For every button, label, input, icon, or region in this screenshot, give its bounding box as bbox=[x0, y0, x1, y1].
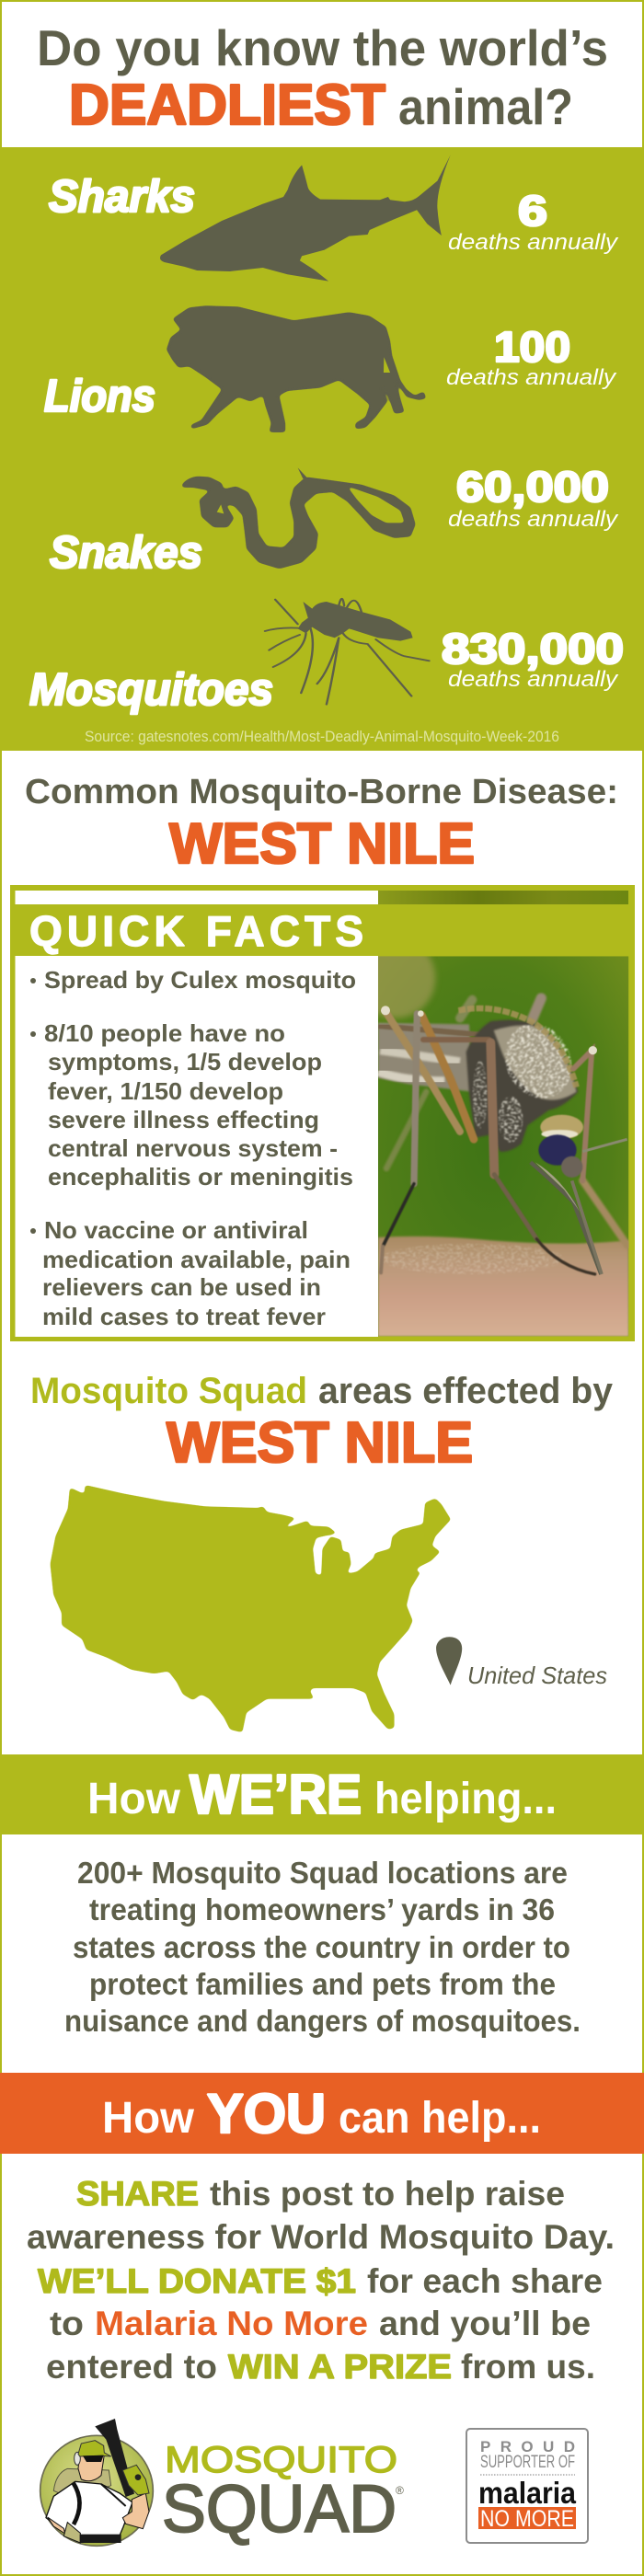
fact list: mild cases to treat fever bbox=[42, 1303, 326, 1330]
icon: mosquito silhouette bbox=[265, 599, 429, 705]
abdomen bbox=[378, 1023, 472, 1092]
fact list: 8/10 people have no bbox=[44, 1019, 285, 1047]
text block: how we're helping: states across the country in order to bbox=[73, 1930, 570, 1964]
heading: common mosquito-borne disease: WEST NILE bbox=[169, 812, 475, 876]
fact list: encephalitis or meningitis bbox=[48, 1163, 353, 1190]
text block: how we're helping: 200+ Mosquito Squad locations are bbox=[77, 1856, 568, 1890]
mosquito deaths number: 830,000 bbox=[442, 625, 624, 673]
legs bbox=[381, 1010, 595, 1274]
map: United States bbox=[50, 1485, 451, 1732]
icon: lion silhouette bbox=[167, 305, 426, 432]
badge: proud supporter of malaria no more bbox=[466, 2429, 588, 2543]
shark deaths number: 6 bbox=[518, 187, 547, 235]
text block: how you can help: WIN A PRIZE bbox=[228, 2348, 452, 2386]
lion label: Lions bbox=[44, 372, 155, 421]
panel: animal death comparison bbox=[0, 147, 644, 751]
snake label: Snakes bbox=[50, 528, 202, 578]
panel: quick facts bbox=[10, 885, 635, 1341]
text block: how we're helping: treating homeowners’ yards in 36 bbox=[89, 1892, 555, 1926]
text block: how you can help: WE’LL DONATE $1 bbox=[38, 2262, 356, 2300]
source note: Source: gatesnotes.com/Health/Most-Deadly-Animal-Mosquito-Week-2016 bbox=[85, 728, 559, 745]
lion deaths number: deaths annually bbox=[446, 365, 617, 390]
header panel bbox=[1, 1, 643, 148]
title line 1: Do you know the world’s bbox=[37, 19, 608, 76]
lion deaths number: 100 bbox=[494, 323, 570, 371]
text block: how you can help: and you’ll be bbox=[379, 2305, 591, 2342]
banner: how you can help: can help... bbox=[339, 2094, 541, 2143]
banner: how we're helping: WE’RE bbox=[190, 1764, 362, 1825]
text block: how you can help: awareness for World Mosquito Day. bbox=[27, 2218, 615, 2256]
banner: how you can help bbox=[0, 2073, 644, 2154]
title line 2: animal? bbox=[398, 78, 573, 135]
side borders bbox=[1, 751, 643, 2575]
fact list bbox=[30, 966, 356, 1330]
text block: how you can help: to bbox=[50, 2305, 84, 2342]
heading: common mosquito-borne disease: Common Mosquito-Borne Disease: bbox=[25, 773, 618, 811]
mosquito label: Mosquitoes bbox=[29, 665, 273, 715]
text block: how you can help bbox=[27, 2175, 615, 2386]
fact list: No vaccine or antiviral bbox=[44, 1216, 308, 1244]
quick facts heading: QUICK FACTS bbox=[29, 907, 363, 955]
fact list: severe illness effecting bbox=[48, 1106, 319, 1133]
fact list: relievers can be used in bbox=[42, 1273, 321, 1301]
text block: how you can help: from us. bbox=[461, 2348, 595, 2386]
text block: how you can help: this post to help raise bbox=[210, 2175, 565, 2213]
heading: areas effected bbox=[30, 1371, 614, 1475]
banner: how we're helping bbox=[0, 1754, 644, 1834]
title line 2: DEADLIEST bbox=[69, 74, 385, 137]
wordmark: MOSQUITO bbox=[165, 2440, 397, 2480]
mosquito deaths number: deaths annually bbox=[448, 667, 619, 692]
banner: how we're helping: helping... bbox=[374, 1775, 557, 1823]
snake deaths number bbox=[448, 463, 619, 532]
banner: how you can help: YOU bbox=[207, 2083, 326, 2145]
logo: Mosquito Squad bbox=[40, 2419, 404, 2547]
title line 2 bbox=[69, 74, 573, 137]
heading: areas effected: WEST NILE bbox=[167, 1411, 473, 1475]
fact list: Spread by Culex mosquito bbox=[44, 966, 356, 994]
text block: how we're helping bbox=[64, 1856, 581, 2038]
mosquito deaths number bbox=[442, 625, 624, 692]
text block: how you can help: Malaria No More bbox=[95, 2305, 368, 2342]
lion deaths number bbox=[446, 323, 617, 390]
snake deaths number: deaths annually bbox=[448, 507, 619, 532]
map legend bbox=[436, 1637, 607, 1689]
icon: mascot bbox=[40, 2419, 153, 2546]
text block: how you can help: for each share bbox=[367, 2262, 603, 2300]
shark label: Sharks bbox=[49, 172, 195, 222]
snake deaths number: 60,000 bbox=[456, 463, 609, 511]
text block: how you can help: entered to bbox=[46, 2348, 217, 2386]
shark deaths number: deaths annually bbox=[448, 230, 619, 255]
badge: proud supporter of malaria no more: PROUD bbox=[480, 2438, 575, 2455]
fact list: fever, 1/150 develop bbox=[48, 1077, 283, 1105]
text block: how we're helping: protect families and pets from the bbox=[89, 1967, 556, 2001]
thorax bbox=[466, 1019, 578, 1152]
logo: Mosquito Squad: SQUAD bbox=[162, 2472, 397, 2547]
blurred background legs bbox=[386, 998, 627, 1245]
shark deaths number bbox=[448, 187, 619, 255]
photo: mosquito on skin bbox=[378, 956, 629, 1337]
head bbox=[531, 1162, 601, 1274]
heading: common mosquito-borne disease bbox=[25, 773, 618, 876]
heading: areas effected: areas effected by bbox=[318, 1371, 614, 1411]
banner: how you can help: How bbox=[102, 2094, 195, 2143]
text block: how we're helping: nuisance and dangers of mosquitoes. bbox=[64, 2004, 581, 2038]
icon: location pin bbox=[436, 1637, 462, 1685]
text block: how you can help: SHARE bbox=[76, 2175, 199, 2213]
badge: proud supporter of malaria no more: malaria bbox=[478, 2476, 577, 2510]
banner: how we're helping: How bbox=[87, 1775, 181, 1823]
fact list: medication available, pain bbox=[42, 1246, 351, 1273]
heading: areas effected: Mosquito Squad bbox=[30, 1371, 307, 1411]
badge: proud supporter of malaria no more: SUPPORTER OF bbox=[480, 2453, 575, 2472]
icon: shark silhouette bbox=[160, 155, 451, 282]
badge: proud supporter of malaria no more: NO MORE bbox=[480, 2506, 574, 2532]
logo: Mosquito Squad: ® bbox=[396, 2484, 404, 2497]
fact list: central nervous system - bbox=[48, 1134, 338, 1162]
icon: snake silhouette bbox=[182, 467, 416, 569]
fact list: symptoms, 1/5 develop bbox=[48, 1048, 322, 1075]
map legend: United States bbox=[467, 1662, 607, 1689]
